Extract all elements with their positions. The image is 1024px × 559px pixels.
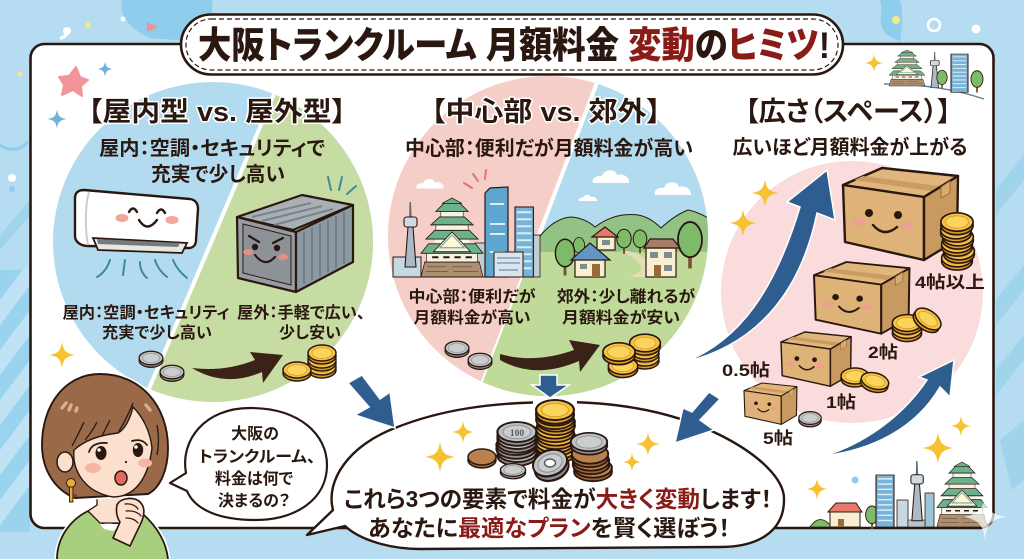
conclusion text [344, 486, 772, 541]
title banner: 大阪トランクルーム 月額料金 変動のヒミツ! [198, 25, 830, 66]
panel: indoor vs outdoor circle [53, 82, 373, 402]
text: indoor note: 充実で少し高い [102, 323, 212, 342]
label: 1 tatami: 1帖 [826, 393, 856, 412]
text: indoor note [62, 303, 230, 342]
hair strands and highlights [72, 403, 158, 455]
label: 4 tatami or more: 4帖以上 [915, 273, 985, 292]
text: indoor description top: 充実で少し高い [151, 163, 285, 186]
text: indoor note: 屋内：空調・セキュリティ [62, 303, 230, 322]
question speech bubble: トランクルーム、 [198, 448, 316, 466]
arrow: from left section to bubble [348, 375, 395, 428]
sparkles in bubble [425, 421, 660, 472]
text: suburb note [557, 287, 695, 327]
coin pile: 100 [510, 429, 524, 439]
text: suburb note: 郊外：少し離れるが [557, 287, 695, 306]
blue arrow lower right upward [824, 360, 954, 456]
heading: indoor vs outdoor: 【屋内型 vs. 屋外型】 [88, 97, 346, 127]
title banner [181, 14, 843, 74]
large speech bubble with conclusion [307, 398, 784, 549]
illustration: Osaka city center [393, 170, 540, 277]
icon: air conditioner with smiling face [75, 190, 198, 278]
face [74, 407, 152, 497]
text: size description: 広いほど月額料金が上がる [732, 135, 968, 159]
text: center note: 月額料金が高い [414, 308, 531, 327]
label: 5 tatami: 5帖 [763, 429, 793, 448]
decorative stars top-left [48, 62, 112, 128]
question speech bubble: 大阪の [231, 425, 279, 443]
icon: outdoor container with face [237, 177, 356, 292]
question speech bubble [170, 408, 327, 520]
text: center note [408, 287, 536, 327]
conclusion text: これら3つの要素で料金が大きく変動します！ [344, 486, 772, 512]
question speech bubble: 決まるの？ [218, 492, 290, 510]
text: suburb note: 月額料金が安い [562, 308, 680, 327]
earring key [66, 478, 76, 502]
heading: size: 【広さ（スペース）】 [745, 97, 951, 127]
text: outdoor note [237, 303, 365, 342]
character: thinking woman [42, 374, 168, 559]
illustration: suburb houses and trees [555, 170, 702, 277]
blue arrow large upward [685, 170, 835, 362]
large sparkles around size circle [49, 180, 971, 500]
heading: center vs suburb: 【中心部 vs. 郊外】 [431, 97, 661, 127]
panel: center vs suburb circle [385, 70, 720, 402]
coins and arrow: indoor to outdoor [139, 345, 336, 383]
box: 1 tatami and coins [781, 332, 891, 395]
arrow: from center section to bubble [532, 375, 569, 398]
neck [88, 490, 130, 523]
box: 2 tatami and coins [814, 262, 945, 342]
panel: size circle [721, 161, 983, 423]
eyes, cheeks, mouth [96, 446, 106, 460]
coin pile [468, 398, 612, 486]
corner sparkle [964, 496, 1006, 540]
box: smallest and silver coin [744, 383, 821, 427]
question speech bubble: 料金は何で [215, 469, 293, 488]
text: indoor description top [99, 137, 325, 186]
illustration: mini Osaka skyline top right [865, 50, 984, 99]
label: 2 tatami: 2帖 [868, 343, 898, 362]
text: indoor description top: 屋内：空調・セキュリティで [99, 137, 325, 160]
ear [57, 452, 73, 472]
sweater [57, 511, 168, 559]
text: center description top: 中心部：便利だが月額料金が高い [405, 136, 693, 160]
arrow: from size section to bubble [675, 392, 720, 443]
text: outdoor note: 少し安い [279, 323, 341, 342]
conclusion text: あなたに最適なプランを賢く選ぼう！ [368, 515, 730, 541]
label: 0.5 tatami: 0.5帖 [722, 361, 770, 380]
hair back [42, 374, 168, 498]
coins and arrow: center to suburb [445, 334, 660, 378]
box: 4 tatami and coins [843, 168, 974, 270]
illustration: bottom right skyline [810, 461, 987, 529]
hand [113, 498, 144, 546]
text: center note: 中心部：便利だが [408, 287, 536, 306]
text: outdoor note: 屋外：手軽で広い、 [237, 303, 365, 322]
